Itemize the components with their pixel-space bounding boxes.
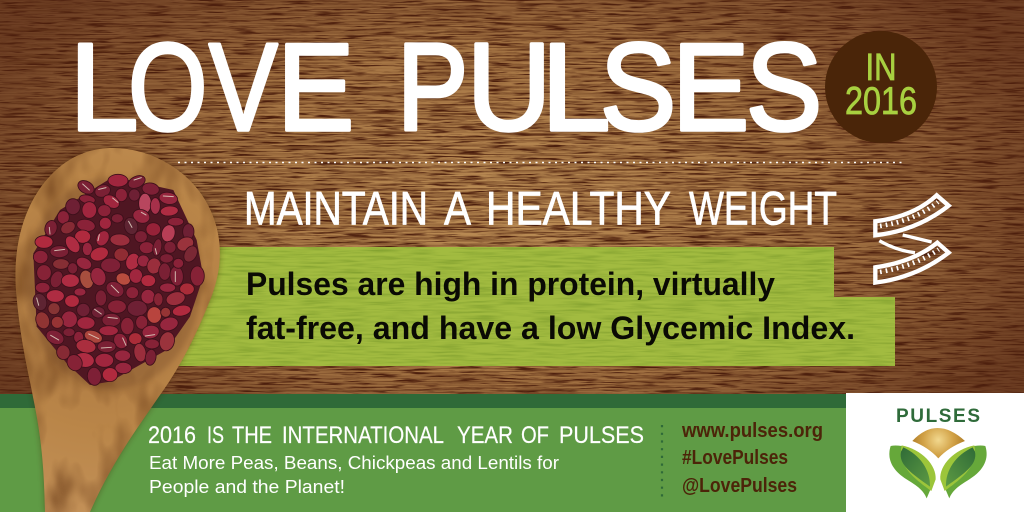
- title: Love Pulses: U: [467, 19, 551, 157]
- title: Love Pulses: S: [746, 19, 822, 157]
- title: Love Pulses: L: [542, 19, 610, 157]
- title: Love Pulses: S: [600, 19, 676, 157]
- footer headline: PULSES: [559, 422, 644, 449]
- subheading: maintain a healthy weight: WEIGHT: [689, 182, 837, 234]
- footer headline: OF: [521, 422, 549, 449]
- footer headline: [148, 422, 644, 449]
- wooden spoon: [15, 148, 220, 512]
- title: Love Pulses: E: [672, 19, 749, 157]
- footer tagline: Eat More Peas, Beans, Chickpeas and Lentils for: [149, 453, 559, 473]
- title: Love Pulses: V: [209, 19, 278, 157]
- message text: Pulses are high in protein, virtually: [246, 266, 775, 302]
- subheading: maintain a healthy weight: HEALTHY: [486, 182, 671, 234]
- footer headline: YEAR: [457, 422, 513, 449]
- footer links: #LovePulses: [682, 447, 788, 469]
- title: Love Pulses: [70, 18, 822, 158]
- footer tagline: [149, 453, 559, 497]
- footer links: @LovePulses: [682, 475, 797, 497]
- badge: in 2016: [825, 31, 937, 143]
- badge: in 2016: IN: [866, 47, 896, 89]
- footer tagline: People and the Planet!: [149, 477, 345, 497]
- subheading: maintain a healthy weight: [244, 182, 837, 234]
- footer links: [681, 420, 823, 497]
- message text: fat-free, and have a low Glycemic Index.: [246, 310, 855, 346]
- title: Love Pulses: P: [397, 18, 468, 157]
- title: Love Pulses: E: [277, 19, 354, 157]
- footer headline: THE: [232, 422, 272, 449]
- footer headline: IS: [207, 422, 224, 449]
- icon: measuring tape: [875, 195, 949, 283]
- logo wordmark: PULSES: [896, 406, 980, 427]
- title: Love Pulses: O: [128, 19, 207, 158]
- title: Love Pulses: L: [70, 19, 138, 157]
- logo box: [846, 393, 1024, 512]
- footer headline: 2016: [148, 422, 196, 449]
- subheading: maintain a healthy weight: MAINTAIN: [244, 182, 428, 234]
- badge: in 2016: 2016: [845, 80, 917, 123]
- subheading: maintain a healthy weight: A: [444, 182, 472, 234]
- wood background: [0, 0, 1024, 394]
- message text: [246, 266, 855, 346]
- red adzuki beans: [31, 173, 204, 386]
- footer band: [0, 394, 846, 512]
- footer links: www.pulses.org: [681, 420, 823, 442]
- green message panel: [170, 247, 895, 366]
- footer headline: INTERNATIONAL: [282, 422, 444, 449]
- logo mark: sun and leaves: [889, 428, 987, 498]
